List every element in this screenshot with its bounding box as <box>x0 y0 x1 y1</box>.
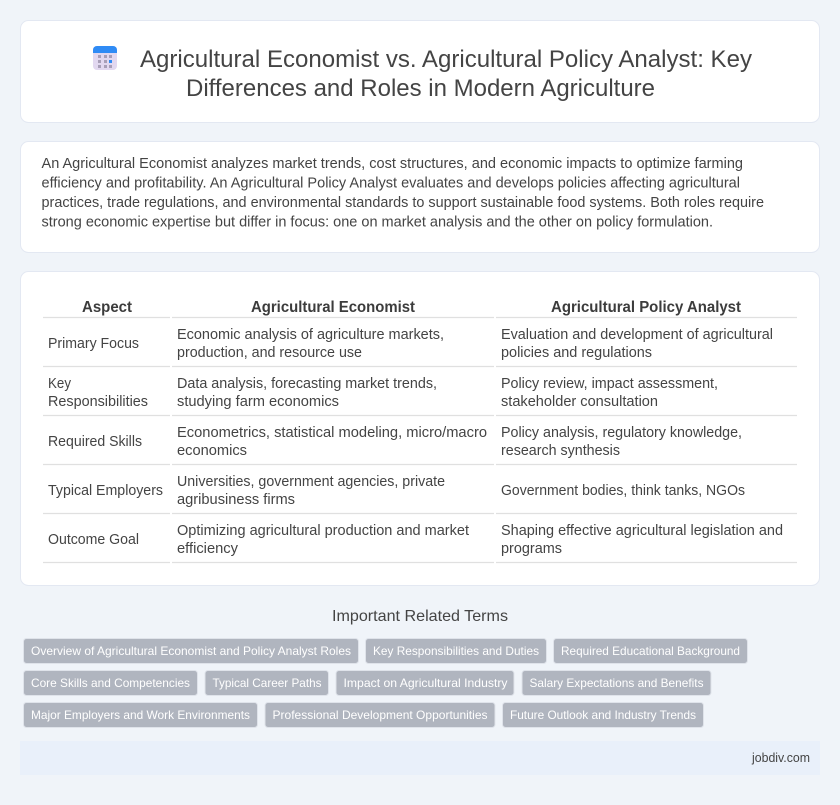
row: key responsibilities: Data analysis, forecasting market trends, <box>177 376 437 392</box>
row: primary focus: Economic analysis of agriculture markets, <box>177 327 444 343</box>
heading: important related terms: Important Related Terms <box>332 608 508 625</box>
text block: introduction paragraph: strong economic expertise but differ in focus: one on market analysis and the other on policy formulation. <box>42 214 713 230</box>
title: Agricultural Economist vs. Agricultural Policy Analyst: Key <box>140 46 752 73</box>
tag group: related terms: Major Employers and Work Environments <box>31 708 250 722</box>
row: outcome goal: efficiency <box>177 541 239 557</box>
row: primary focus: production, and resource use <box>177 345 362 361</box>
row: typical employers: Government bodies, think tanks, NGOs <box>501 483 745 499</box>
title: Differences and Roles in Modern Agriculture <box>186 75 655 102</box>
tag group: related terms: Typical Career Paths <box>212 676 322 690</box>
row: outcome goal: Shaping effective agricultural legislation and <box>501 523 783 539</box>
row: outcome goal: programs <box>501 541 562 557</box>
row: key responsibilities: stakeholder consultation <box>501 394 658 410</box>
row: key responsibilities: Key <box>48 376 72 392</box>
row: typical employers: Universities, government agencies, private <box>177 474 445 490</box>
tag group: related terms: Overview of Agricultural Economist and Policy Analyst Roles <box>31 644 351 658</box>
row: typical employers <box>48 474 745 508</box>
text block: introduction paragraph: efficiency and profitability. An Agricultural Policy Analyst evaluates and develops policies affecting agricultural <box>42 176 740 192</box>
tag group: related terms: Salary Expectations and Benefits <box>530 676 704 690</box>
panel: introduction <box>20 142 820 252</box>
tag group: related terms: Professional Development Opportunities <box>272 708 488 722</box>
table header: Agricultural Policy Analyst <box>551 299 742 316</box>
row: required skills: Policy analysis, regulatory knowledge, <box>501 425 742 441</box>
text block: introduction paragraph: An Agricultural Economist analyzes market trends, cost structures, and economic impacts to optimize farming <box>42 156 743 172</box>
text block: introduction paragraph <box>42 156 764 230</box>
row: key responsibilities <box>48 376 718 410</box>
row: outcome goal <box>48 523 783 557</box>
footer <box>20 741 820 775</box>
tag group: related terms: Key Responsibilities and Duties <box>373 644 539 658</box>
tag group: related terms: Impact on Agricultural Industry <box>344 676 508 690</box>
table header: Agricultural Economist <box>251 299 416 316</box>
tag group: related terms <box>24 638 748 728</box>
panel: comparison table <box>20 272 820 586</box>
tag group: related terms: Core Skills and Competencies <box>31 676 190 690</box>
tag group: related terms: Future Outlook and Industry Trends <box>510 708 696 722</box>
table header <box>82 299 742 316</box>
row: outcome goal: Outcome Goal <box>48 532 139 548</box>
table header: Aspect <box>82 299 133 316</box>
row: required skills: Required Skills <box>48 434 142 450</box>
row: required skills: economics <box>177 443 247 459</box>
text block: introduction paragraph: practices, trade regulations, and environmental standards to support sustainable food systems. Both roles require <box>42 195 764 211</box>
row: outcome goal: Optimizing agricultural production and market <box>177 523 469 539</box>
row: primary focus: policies and regulations <box>501 345 652 361</box>
row: primary focus: Evaluation and development of agricultural <box>501 327 773 343</box>
row: typical employers: agribusiness firms <box>177 492 295 508</box>
row: key responsibilities: Responsibilities <box>48 394 148 410</box>
row: required skills: Econometrics, statistical modeling, micro/macro <box>177 425 487 441</box>
row: required skills <box>48 425 742 459</box>
row: key responsibilities: studying farm economics <box>177 394 339 410</box>
icon: calendar <box>93 46 117 70</box>
panel: title header <box>20 20 820 122</box>
row: primary focus <box>48 327 773 361</box>
tag group: related terms: Required Educational Background <box>561 644 740 658</box>
footer: jobdiv.com <box>751 751 810 765</box>
row: required skills: research synthesis <box>501 443 620 459</box>
row: key responsibilities: Policy review, impact assessment, <box>501 376 718 392</box>
row: typical employers: Typical Employers <box>48 483 163 499</box>
row: primary focus: Primary Focus <box>48 336 139 352</box>
title <box>140 46 752 102</box>
